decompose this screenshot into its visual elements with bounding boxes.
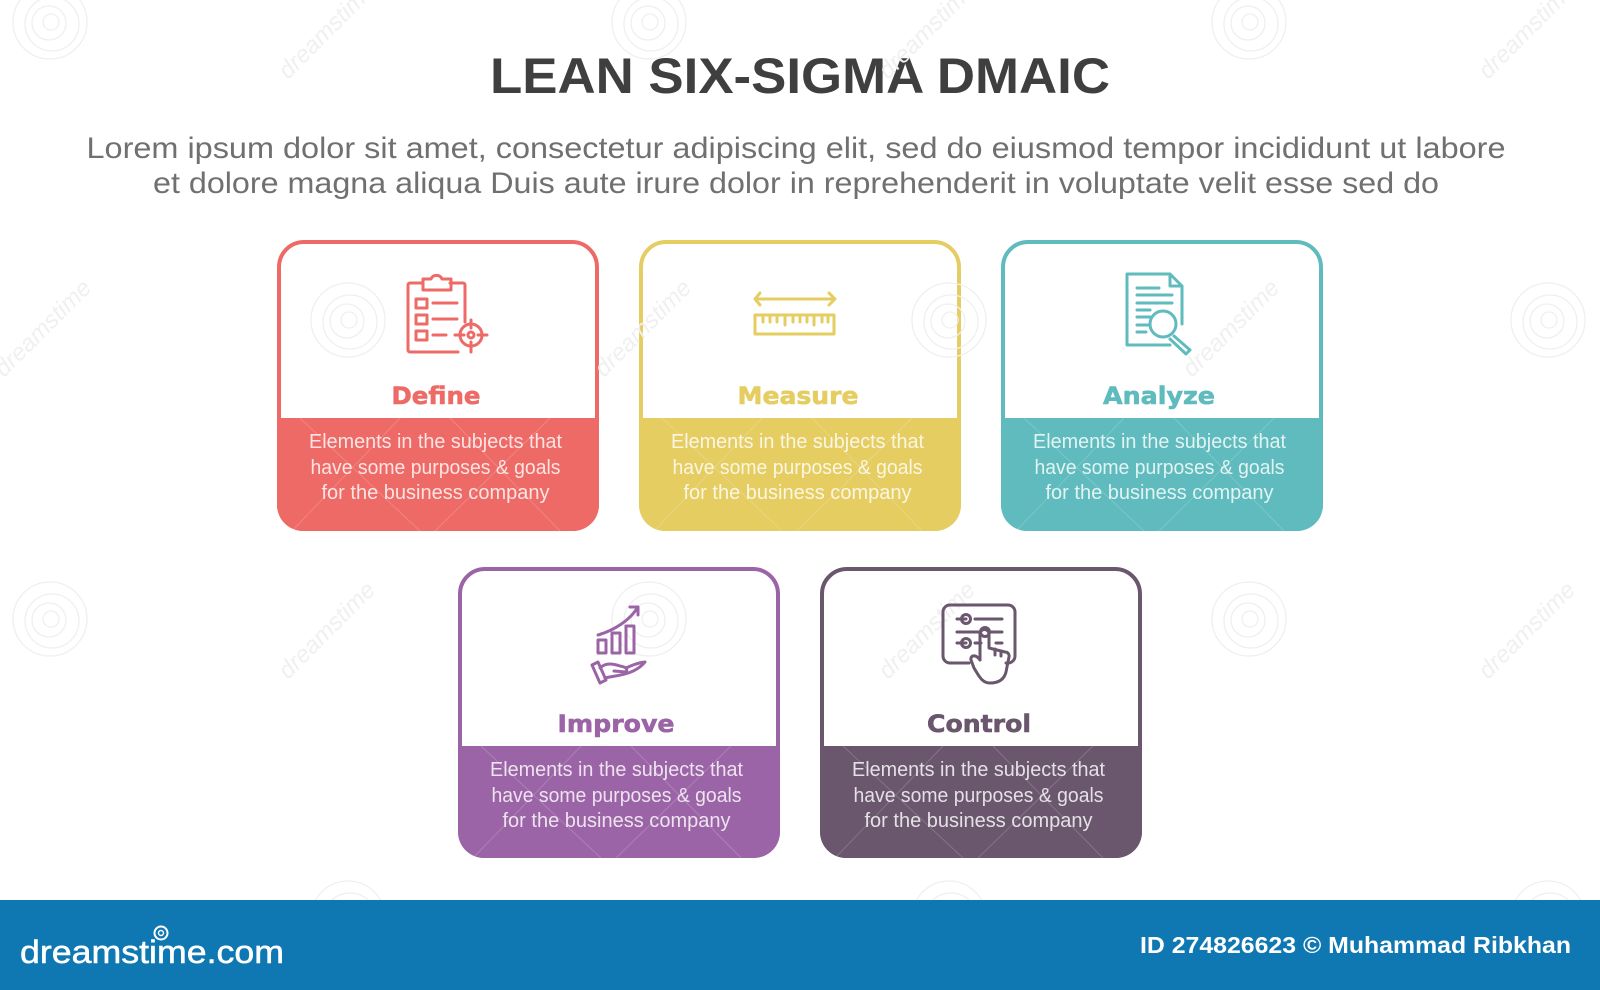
heading: Analyze: Analyze <box>1103 382 1215 410</box>
body text: Improve: for the business company <box>502 810 730 832</box>
watermark spirals: dreamstime <box>273 576 381 684</box>
watermark spirals: dreamstime <box>1177 274 1285 382</box>
footer banner <box>0 900 1600 990</box>
panel: Control <box>820 569 1142 858</box>
body text: Measure: Elements in the subjects that <box>671 431 924 453</box>
icon: sliders panel with pointing hand <box>943 605 1015 683</box>
body text: Define: Elements in the subjects that <box>309 431 562 453</box>
watermark spirals: dreamstime <box>589 274 697 382</box>
body text: Improve: Elements in the subjects that <box>490 759 743 781</box>
icon: ruler with width arrow <box>755 293 835 334</box>
body text: Define: have some purposes & goals <box>310 457 560 479</box>
body text: Analyze: for the business company <box>1046 482 1274 504</box>
body text: Control: for the business company <box>864 810 1092 832</box>
icon: clipboard with target <box>408 275 487 352</box>
panel: Improve <box>458 569 780 858</box>
body text: Control <box>852 759 1105 832</box>
body text: Define <box>309 431 562 504</box>
body text: Analyze: Elements in the subjects that <box>1033 431 1286 453</box>
heading: Measure: Measure <box>738 382 858 410</box>
heading: Define: Define <box>392 382 480 410</box>
body text: Analyze <box>1033 431 1286 504</box>
body text: Analyze: have some purposes & goals <box>1034 457 1284 479</box>
subtitle text <box>86 132 1505 200</box>
panel: Analyze <box>1001 242 1323 531</box>
subtitle text: et dolore magna aliqua Duis aute irure dolor in reprehenderit in voluptate velit esse sed do <box>153 167 1439 200</box>
image credit: ID 274826623 © Muhammad Ribkhan <box>1140 932 1571 958</box>
body text: Measure: for the business company <box>684 482 912 504</box>
panel: Measure <box>639 242 961 531</box>
watermark spirals: dreamstime <box>1473 576 1581 684</box>
body text: Control: Elements in the subjects that <box>852 759 1105 781</box>
subtitle text: Lorem ipsum dolor sit amet, consectetur adipiscing elit, sed do eiusmod tempor incididunt ut labore <box>86 132 1505 165</box>
title: LEAN SIX-SIGMA DMAIC <box>490 48 1110 104</box>
body text: Control: have some purposes & goals <box>854 785 1104 807</box>
body text: Improve <box>490 759 743 832</box>
panel: Define <box>277 242 599 531</box>
icon: document with magnifier <box>1127 274 1190 354</box>
body text: Improve: have some purposes & goals <box>492 785 742 807</box>
watermark lines on panels <box>292 418 1284 858</box>
heading: Improve: Improve <box>558 710 674 738</box>
logo: dreamstime: dreamstime.com <box>20 934 284 970</box>
body text: Measure <box>671 431 924 504</box>
watermark spirals: dreamstime <box>873 576 981 684</box>
body text: Measure: have some purposes & goals <box>672 457 922 479</box>
icon: hand with growth chart <box>592 607 645 683</box>
body text: Define: for the business company <box>322 482 550 504</box>
heading: Control: Control <box>927 710 1031 738</box>
